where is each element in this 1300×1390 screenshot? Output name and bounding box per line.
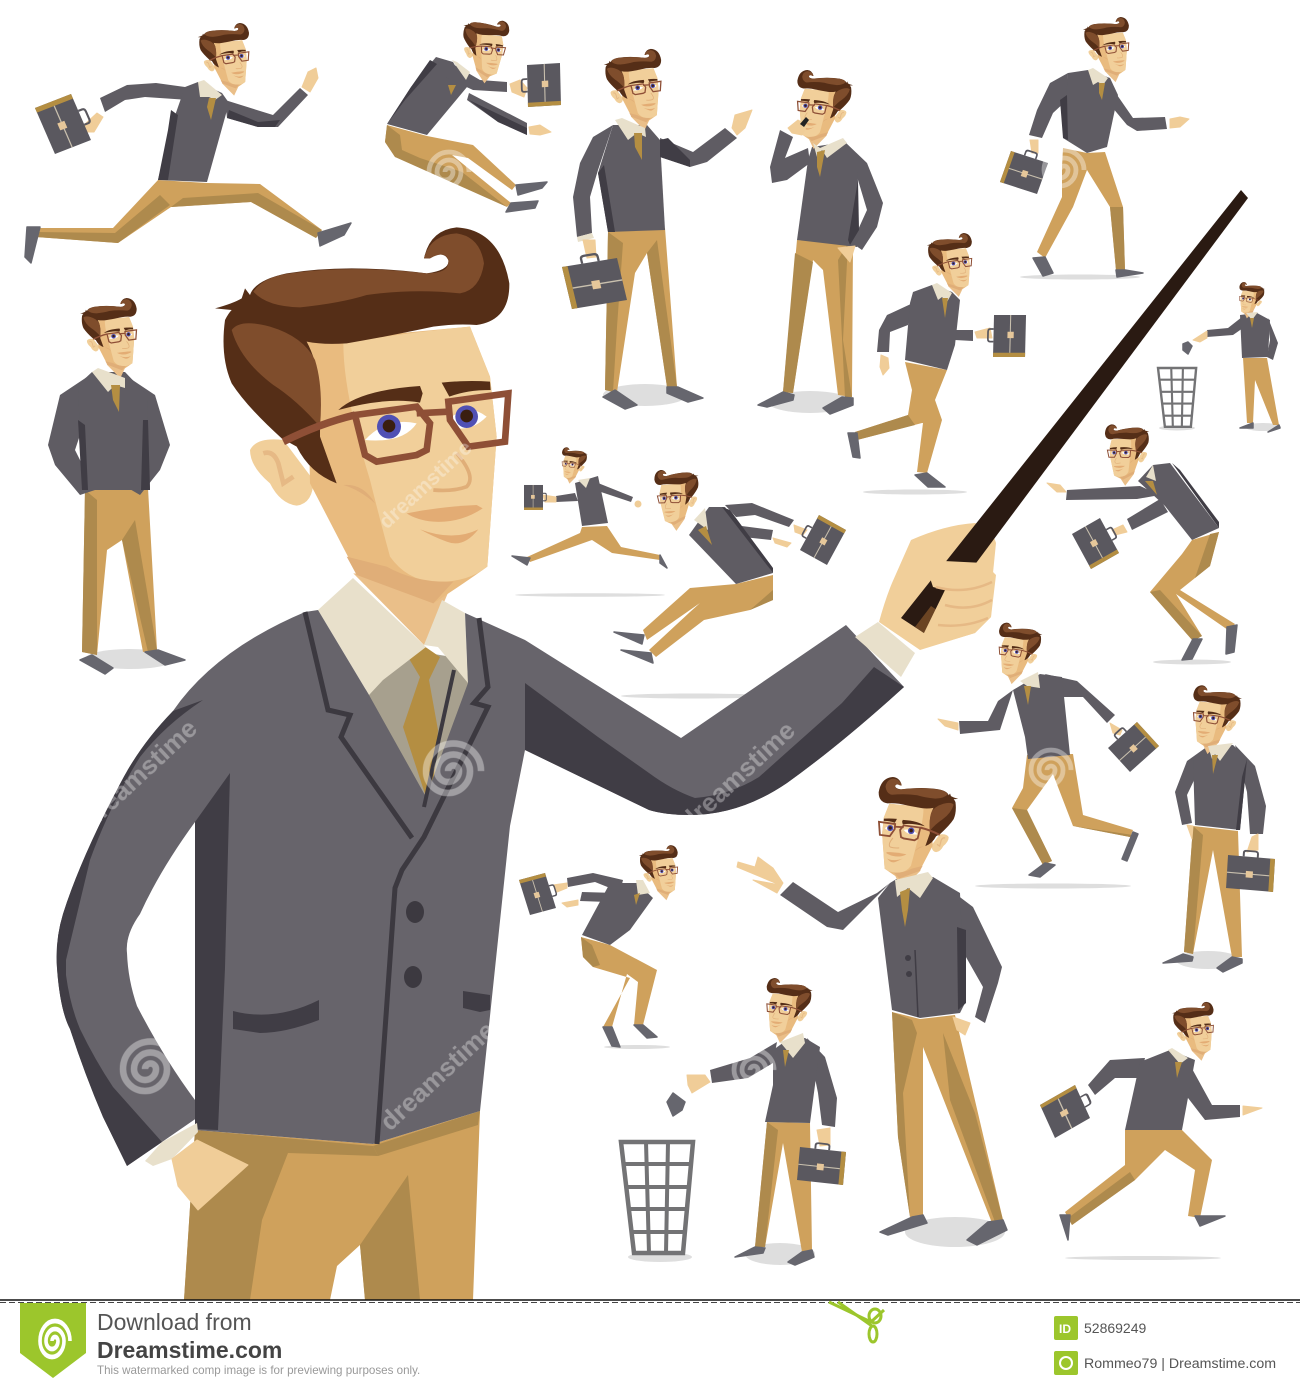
figure: tiny man throwing rubbish	[1158, 282, 1281, 432]
watermark spirals	[123, 150, 1084, 1091]
head	[927, 233, 972, 297]
pointing arm	[525, 622, 915, 815]
jacket	[57, 610, 525, 1166]
watermark text	[76, 436, 801, 1136]
image ID: 52869249	[1084, 1320, 1147, 1336]
briefcase	[1226, 849, 1275, 892]
footer download text: Download from	[97, 1309, 252, 1335]
head	[562, 447, 588, 484]
figure: gesturing man large	[737, 777, 1007, 1247]
head	[879, 777, 958, 890]
head	[1083, 17, 1129, 82]
trousers	[184, 1111, 480, 1300]
figure: running man with case, right	[938, 623, 1159, 888]
footer download text: Dreamstime.com	[97, 1337, 282, 1363]
head	[797, 70, 853, 149]
head	[80, 298, 137, 378]
scissors icon	[829, 1302, 884, 1342]
briefcase	[524, 485, 546, 510]
head	[1239, 282, 1265, 318]
head	[198, 23, 249, 96]
watermark text: dreamstime	[674, 715, 801, 836]
watermark text: dreamstime	[375, 436, 477, 534]
figure: walking man top right	[1000, 17, 1189, 279]
head	[1193, 685, 1242, 754]
briefcase	[797, 1141, 847, 1185]
figure: standing man with briefcase	[560, 49, 752, 409]
head	[1172, 1002, 1214, 1061]
rubbish	[1183, 342, 1192, 354]
figure: man throwing rubbish	[621, 978, 847, 1265]
waste bin	[1158, 368, 1196, 430]
briefcase	[35, 92, 97, 154]
briefcase	[1072, 515, 1124, 569]
figure: running man top left	[25, 23, 351, 263]
figure: running man centre right	[848, 233, 1026, 494]
briefcase	[987, 315, 1026, 357]
figure: diving man centre	[614, 464, 846, 698]
hand and phone	[788, 117, 809, 135]
figure: crouching man right	[1047, 419, 1237, 664]
briefcase	[560, 251, 627, 309]
shirt and tie	[318, 578, 470, 805]
watermark text: dreamstime	[76, 713, 203, 834]
watermark text: dreamstime	[374, 1015, 501, 1136]
pointer stick	[901, 190, 1248, 633]
head	[453, 13, 511, 86]
head	[653, 464, 707, 533]
waste bin	[621, 1142, 693, 1262]
fingers over pointer	[924, 560, 996, 645]
briefcase	[519, 872, 560, 915]
footer download text: This watermarked comp image is for previewing purposes only.	[97, 1364, 420, 1377]
briefcase	[521, 63, 561, 107]
main figure: businessman with pointer	[57, 190, 1248, 1300]
figure: crouching man centre	[519, 845, 678, 1049]
rubbish	[667, 1093, 685, 1116]
head	[1104, 419, 1156, 488]
pointing hand	[879, 523, 996, 650]
Dreamstime ribbon logo	[20, 1303, 86, 1378]
head	[999, 623, 1042, 684]
figure: man on phone	[758, 70, 883, 414]
figure: tiny leaping man	[512, 447, 667, 597]
cuff and pocket hand	[145, 1123, 248, 1210]
figure: jumping man top	[385, 13, 561, 212]
briefcase	[1104, 718, 1159, 772]
head	[604, 49, 661, 130]
figure: running man bottom right	[1040, 1002, 1262, 1260]
head	[215, 227, 509, 645]
footer separator	[0, 1300, 1300, 1302]
head	[767, 978, 813, 1043]
head	[639, 845, 678, 900]
figure: standing man with case, right	[1163, 685, 1275, 972]
briefcase	[1000, 146, 1050, 194]
author credit	[1054, 1351, 1276, 1375]
image ID	[1054, 1316, 1147, 1340]
figure: standing man left	[48, 298, 185, 674]
footer download text	[97, 1309, 420, 1377]
author credit: Rommeo79 | Dreamstime.com	[1084, 1356, 1276, 1372]
briefcase	[1040, 1082, 1096, 1138]
briefcase	[795, 512, 846, 565]
image ID: ID	[1059, 1322, 1071, 1336]
